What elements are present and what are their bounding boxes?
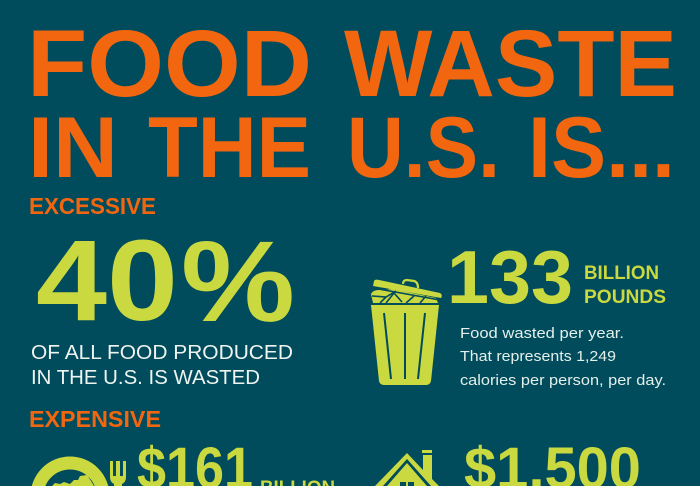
- text: 40 percent description: OF ALL FOOD PRODUCED: [31, 342, 293, 364]
- stat: 133 billion pounds: BILLION: [584, 263, 659, 284]
- stat: 40 percent: 40: [36, 217, 178, 345]
- icon: house: [375, 450, 439, 486]
- stat: 40 percent: [36, 217, 295, 346]
- stat: 133 billion pounds: POUNDS: [584, 287, 666, 308]
- icon: trash can: [371, 280, 442, 385]
- text: food wasted description: Food wasted per year.: [460, 325, 624, 342]
- text: food wasted description: [460, 325, 666, 389]
- title: [27, 11, 677, 196]
- title: IS...: [528, 100, 675, 196]
- text: food wasted description: calories per person, per day.: [460, 372, 666, 389]
- heading: excessive: EXCESSIVE: [29, 193, 156, 219]
- title: FOOD: [27, 11, 312, 117]
- icon: plate and fork: [37, 461, 126, 486]
- text: 40 percent description: [31, 342, 293, 389]
- title: U.S.: [347, 100, 500, 196]
- text: 40 percent description: IN THE U.S. IS WASTED: [31, 367, 260, 389]
- stat: 133 billion pounds: 133: [447, 235, 573, 319]
- title: THE: [148, 100, 311, 196]
- stat: 161 billion: [137, 436, 335, 486]
- heading: expensive: EXPENSIVE: [29, 406, 161, 432]
- text: food wasted description: That represents 1,249: [460, 348, 616, 365]
- stat: 40 percent: %: [181, 218, 295, 346]
- title: IN: [28, 100, 118, 196]
- title: WASTE: [344, 11, 677, 117]
- stat: 133 billion pounds: [447, 235, 666, 319]
